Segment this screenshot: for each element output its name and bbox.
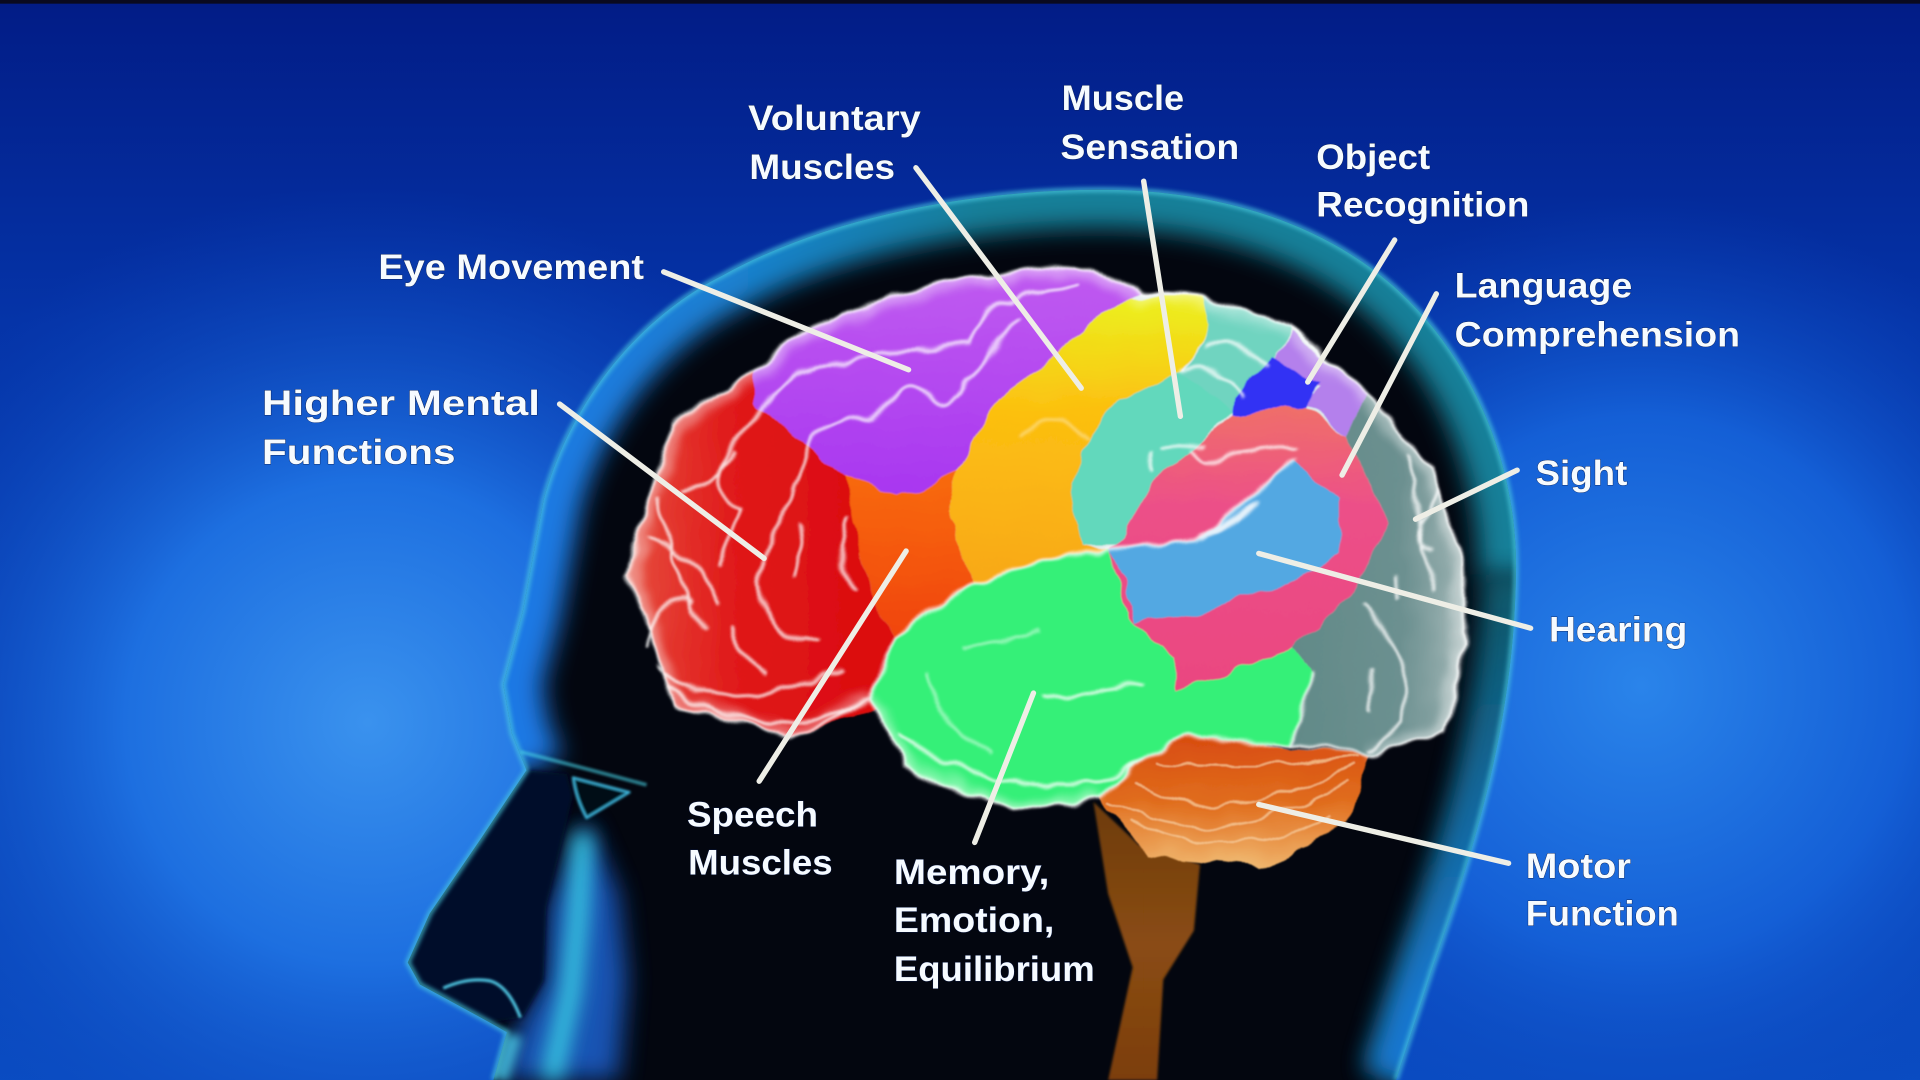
label: Muscle Sensation: Sensation [1060,127,1239,167]
nostril [443,980,520,1018]
line: motor function [1259,804,1509,863]
region: memory, emotion, equilibrium [869,550,1313,811]
label: Speech Muscles: Muscles [688,842,833,882]
line: eye movement [664,272,909,370]
region: frontal lobe, higher mental functions [628,371,893,737]
cheek glow [500,818,627,1080]
line: speech muscles [759,551,906,781]
label: Voluntary Muscles: Muscles [749,147,895,187]
brain underlay [628,264,1467,811]
label: Voluntary Muscles: Voluntary [748,98,921,138]
region: eye movement and voluntary muscles [756,264,1145,497]
label: Higher Mental Functions: Functions [262,432,456,472]
region: upper parietal [1185,298,1289,411]
label: Sight: Sight [1536,453,1628,493]
line: voluntary muscles [916,168,1081,388]
label: Language Comprehension: Comprehension [1455,315,1740,355]
label: Object Recognition [1316,137,1529,225]
line: memory, emotion, equilibrium [975,693,1033,842]
label: Motor Function: Function [1526,894,1679,934]
brain folds, glowing [628,264,1467,811]
label: Higher Mental Functions [262,383,540,472]
line: muscle sensation [1144,181,1180,416]
region: muscle sensation [1071,367,1243,546]
label: Memory, Emotion, Equilibrium: Emotion, [894,900,1054,940]
label: Memory, Emotion, Equilibrium: Memory, [894,852,1049,892]
label: Language Comprehension: Language [1455,266,1632,306]
eye [573,778,629,818]
label: Eye Movement: Eye Movement [378,247,644,287]
brow line [520,752,647,785]
brain [628,264,1467,868]
head silhouette with glowing edge [408,190,1516,1080]
label: Hearing: Hearing [1549,610,1687,650]
region: muscle area, yellow [950,298,1209,583]
region: language comprehension [1111,407,1386,693]
label: Motor Function: Motor [1526,846,1631,886]
brain stem [1093,802,1200,1080]
region: object recognition [1232,362,1322,414]
label: Speech Muscles [687,795,833,882]
label: Object Recognition: Recognition [1316,185,1529,225]
label: Muscle Sensation: Muscle [1062,78,1184,118]
line: higher mental functions [560,404,764,558]
label: Speech Muscles: Speech [687,795,818,835]
region: cerebellum, motor function [1100,733,1369,868]
region: language upper [1272,331,1364,436]
line: object recognition [1308,240,1395,382]
line: hearing [1259,553,1531,628]
label: Memory, Emotion, Equilibrium [894,852,1095,989]
label: Language Comprehension [1455,266,1740,355]
label: Higher Mental Functions: Higher Mental [262,383,540,423]
region: speech muscles [847,473,973,639]
label: Object Recognition: Object [1316,137,1430,177]
label: Muscle Sensation [1060,78,1239,167]
nose interior [408,770,573,1022]
label: Motor Function [1526,846,1679,934]
label: Voluntary Muscles [748,98,921,187]
region: hearing [1111,460,1341,623]
line: sight [1416,470,1517,519]
cerebellum folds [1108,757,1359,843]
region: sight, occipital [1289,391,1467,754]
brain outline glow [628,264,1467,811]
pointer lines [560,168,1531,863]
label: Memory, Emotion, Equilibrium: Equilibrium [894,949,1095,989]
line: language comprehension [1342,294,1436,475]
